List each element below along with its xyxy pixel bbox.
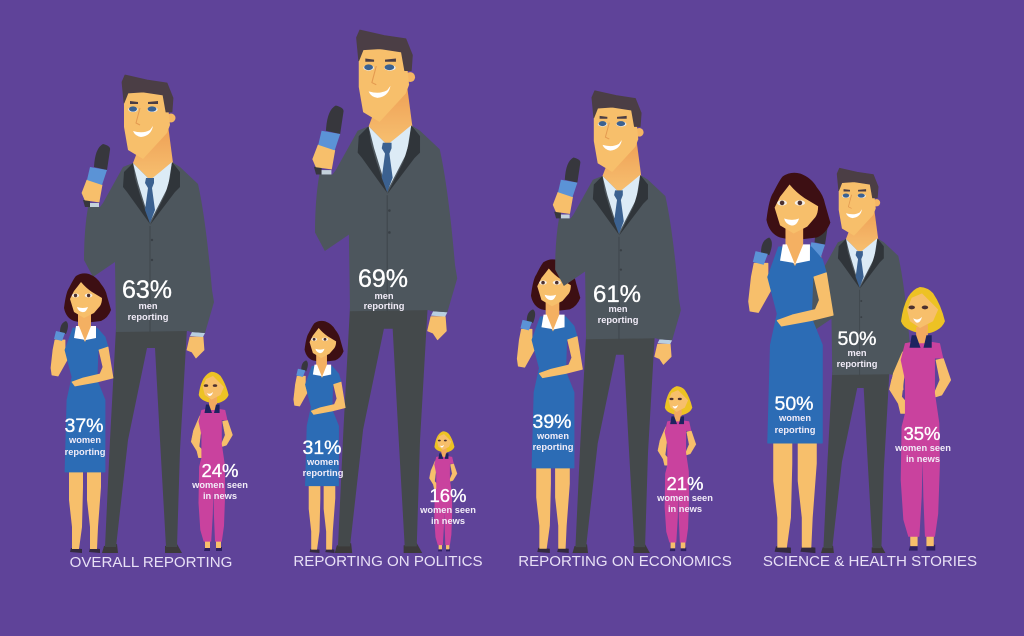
- stat: 50% women reporting: reporting: [775, 425, 816, 435]
- stat: 63% men reporting: [122, 276, 172, 322]
- stat: 50% men reporting: [837, 328, 878, 369]
- stat: 21% women seen in news: women seen: [656, 493, 713, 503]
- stat: 69% men reporting: 69%: [358, 265, 408, 293]
- stat: 31% women reporting: [302, 437, 344, 478]
- stat: 35% women seen in news: [894, 423, 951, 464]
- stat: 50% men reporting: reporting: [837, 359, 878, 369]
- stat: 50% men reporting: 50%: [837, 328, 877, 350]
- stat: 61% men reporting: men: [608, 304, 628, 314]
- stat: 16% women seen in news: 16%: [429, 485, 467, 506]
- stat: 39% women reporting: reporting: [533, 442, 574, 452]
- stat: 16% women seen in news: in news: [431, 516, 465, 526]
- stat: 16% women seen in news: women seen: [419, 505, 476, 515]
- stat: 50% men reporting: men: [847, 348, 867, 358]
- stat: 24% women seen in news: women seen: [191, 480, 248, 490]
- stat: 31% women reporting: reporting: [303, 468, 344, 478]
- stat: 69% men reporting: [358, 265, 408, 311]
- stat: 69% men reporting: men: [374, 291, 394, 301]
- stat: 35% women seen in news: women seen: [894, 443, 951, 453]
- stat: 50% women reporting: [774, 393, 816, 435]
- blue woman figure: [749, 173, 833, 553]
- stat: 50% women reporting: 50%: [774, 393, 814, 415]
- stat: 63% men reporting: men: [138, 301, 158, 311]
- blue woman figure: [517, 259, 582, 553]
- heading: overall reporting: OVERALL REPORTING: [70, 554, 232, 571]
- stat: 50% women reporting: women: [778, 413, 811, 423]
- stat: 35% women seen in news: 35%: [903, 423, 941, 444]
- stat: 35% women seen in news: in news: [906, 454, 940, 464]
- pink woman figure: [429, 431, 457, 551]
- stat: 39% women reporting: 39%: [532, 411, 572, 433]
- stat: 61% men reporting: [593, 281, 641, 325]
- stat: 37% women reporting: [64, 415, 106, 457]
- stat: 61% men reporting: 61%: [593, 281, 641, 308]
- blue woman figure: [51, 273, 113, 553]
- stat: 63% men reporting: 63%: [122, 276, 172, 304]
- blue woman figure: [294, 321, 345, 553]
- stat: 63% men reporting: reporting: [128, 312, 169, 322]
- stat: 24% women seen in news: 24%: [201, 460, 239, 481]
- panel: science and health stories: [749, 168, 977, 570]
- stat: 39% women reporting: [532, 411, 574, 452]
- heading: reporting on economics: REPORTING ON ECONOMICS: [518, 553, 732, 570]
- stat: 16% women seen in news: [419, 485, 476, 526]
- stat: 39% women reporting: women: [536, 431, 569, 441]
- heading: reporting on politics: REPORTING ON POLITICS: [293, 553, 483, 570]
- man figure: [313, 30, 457, 553]
- pink woman figure: [890, 287, 951, 551]
- stat: 21% women seen in news: in news: [668, 504, 702, 514]
- stat: 37% women reporting: women: [68, 435, 101, 445]
- stat: 61% men reporting: reporting: [598, 315, 639, 325]
- pink woman figure: [658, 386, 696, 551]
- stat: 31% women reporting: 31%: [302, 437, 342, 459]
- man figure: [82, 75, 214, 553]
- panel: reporting on economics: [517, 91, 732, 570]
- heading: science and health stories: SCIENCE & HEALTH STORIES: [763, 553, 977, 570]
- stat: 21% women seen in news: 21%: [666, 473, 704, 494]
- stat: 69% men reporting: reporting: [364, 301, 405, 311]
- pink woman figure: [191, 372, 232, 551]
- man figure: [805, 168, 911, 553]
- panel: reporting on politics: [293, 30, 483, 570]
- stat: 37% women reporting: 37%: [64, 415, 104, 437]
- stat: 21% women seen in news: [656, 473, 713, 514]
- stat: 24% women seen in news: [191, 460, 248, 501]
- man figure: [553, 91, 681, 553]
- stat: 31% women reporting: women: [306, 457, 339, 467]
- stat: 37% women reporting: reporting: [65, 447, 106, 457]
- panel: overall reporting: [51, 75, 248, 571]
- stat: 24% women seen in news: in news: [203, 491, 237, 501]
